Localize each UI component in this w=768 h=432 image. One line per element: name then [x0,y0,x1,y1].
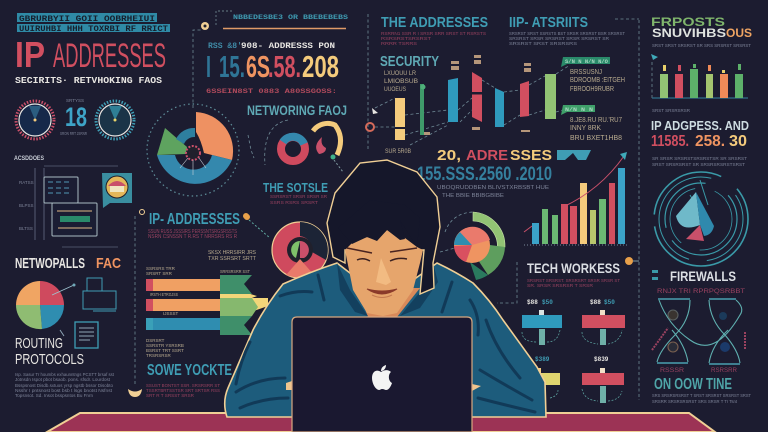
widgets: tech workess: $50 [604,299,615,306]
text block: sowe yockte: SRT R T SRSST SRSR [146,393,194,399]
heading: on oow tine: SRSRR SRSRSRSRST SRS SRSR T Tr Tsnt [652,399,738,405]
chart: security bars [366,55,570,155]
fringe [338,200,420,247]
text block: routing: Nsshr I pntsnost bost bsb t lsgs bnotst Nsfnst [15,388,113,394]
heading: the sotsle: SSRSRST SRSR SRSR SR [270,194,328,200]
widgets: tech workess: $839 [594,356,609,363]
heading: security [380,53,439,93]
shirt folds [236,275,535,412]
hands [286,381,481,391]
header: centre caption: NBBEDESBE3 OR BBEBEBEBS [233,14,348,21]
heading: ip atsriits: IIP- ATSRIITS [509,14,588,31]
big stats: 20 addresses: SSES [510,147,552,164]
big ip number: .58. [268,49,301,84]
heading: tech workess: TECH WORKESS [527,260,620,276]
chart: ribbon bars: IRSTH ETRGJSS [150,292,178,297]
header: centre caption [201,11,348,30]
heading: the addresses [381,14,488,47]
table [47,413,715,432]
icon: left gauge [16,101,54,139]
panel: device diagram: BLTSS [19,226,33,231]
chart: ribbon bars [146,250,268,358]
chart: column chart: SRST SRSRSRSR [652,108,691,113]
callouts: tags [561,57,625,142]
chart: left mid ring [244,214,328,278]
facial features [347,248,417,253]
hair [327,160,440,294]
heading: ip atsriits: SRSRST SRST SSRSTS BST SRSR SRSRST BSR SRSRST [509,31,625,37]
chart: ribbon bars: SRRSRSRR SST [220,269,250,274]
heading: firewalls: FIREWALLS [670,268,736,284]
chart: ribbon bars: TXR SSRSRT SRTT [208,256,256,262]
text block: sowe yockte [146,383,220,399]
chart: ribbon bars: SSRSTR YSRSRB [146,343,184,348]
chart: ribbon bars: SKSX HRRSIRR JRS [208,250,257,256]
labels: hourglass [660,368,738,374]
text block: sowe yockte: SSUST BONTST SSR. SRSRSRR ST [146,383,220,389]
big stats: 20 addresses: 20, [437,147,461,164]
callouts: tags: 8.JE8.RU RU.'RU7 [570,117,622,124]
heading: tech workess: SR. SRSR SRSRSR T SRSR [527,283,594,289]
panel: device diagram [19,166,118,247]
heading: firewalls [652,268,745,295]
heading: ip addresses: SSUN RUSS JSSSIRS PERSSNTSRGSRSSTS [148,229,238,235]
collar shadows [337,263,438,316]
subtitle: SECIRITS· RETVHOKING FAOS [15,76,163,86]
chart: ribbon bars: SRSRT SRR [146,271,173,276]
chart: ribbon bars: DSRSRT [146,338,165,343]
heading: ip addresses: IP- ADDRESSES [149,211,240,228]
heading: ip atsriits: SRSRST SRSR SRSRST SRSR SRSRST SR [509,36,610,42]
big stats: 20 addresses: THE BBIE BBIBGBIBE [442,193,504,199]
big ip number: I [206,49,211,84]
heading: security: UUOEUS [384,86,407,93]
stat: 18: 18 [65,102,87,132]
laptop [292,317,472,432]
heading: ip address and: SRST SRSRSRST SR SRSRSRSRSTSRST [652,162,745,168]
text block: routing: Bsspsnost Disdb.sxtuos yrsp ngstb bssor Disobto [15,383,113,389]
chart: ribbon bars: SSRSRS TRR [146,266,176,271]
heading: routing protocols: PROTOCOLS [15,351,84,368]
callouts: tags: BDROOMB :EITGEH [570,77,625,84]
face [345,230,423,316]
icon: apple logo [372,365,392,390]
widgets: tech workess: $88 [590,299,601,306]
heading: ip addresses [140,210,249,240]
heading: firewalls: RNJX TRI RPRPQSRBBT [657,288,745,295]
chart: radar rings [654,172,748,266]
chart: security bars: SUR 5R0B [385,149,411,155]
widgets: tech workess: $389 [535,356,550,363]
chart: column chart [651,54,748,113]
big ip number [206,42,339,95]
heading: ip address and: 258. [695,133,725,150]
callouts: tags: BRU BXET1HB8 [570,135,622,142]
heading: frposts [651,15,752,49]
heading: ip address and: 11585. [651,133,689,150]
text block: sowe yockte: TSSRTBRTSSTSR SRT SRTSR RSS [146,388,220,394]
big ip number: RSS &8' [208,42,242,51]
heading: on oow tine: ON OOW TINE [654,376,732,393]
big stats: 20 addresses: 155.SSS.2560 .2010 [417,164,552,185]
heading: frposts: SNUVIHBS [652,26,726,40]
stat: 18: SRTYSS [66,98,84,103]
callouts: tags: FBROOH9RUBR [570,86,614,93]
heading: the addresses: RRRR TSRRS [381,41,417,47]
stat: 18 [60,98,88,136]
big stats: 20 addresses: ADRE [466,147,508,164]
big stats: 20 addresses: UBOQRUDDBEN BLIVSTXRBSBT HUE [437,185,549,191]
heading: security: LXUOUU LR [384,70,416,77]
chart: ribbon bars: TRSRSRSR [146,353,172,358]
heading: acsddoes: ACSDDOES [14,156,44,162]
widgets: tech workess [522,299,625,403]
icon: right gauge [96,101,134,139]
heading: on oow tine [652,376,751,405]
heading: security: LMIOBSUB [384,78,418,85]
text block: routing: Topsnsot. Sd. Insot bsspsntos Bu Fnrn [15,393,93,399]
top banner: GBRURBYII GOII OOBRHEIUI [19,15,155,24]
widgets: tech workess: $88 [527,299,538,306]
heading: the sotsle [263,180,328,206]
heading: frposts: FRPOSTS [651,15,725,29]
heading: sowe yockte: SOWE YOCKTE [147,362,232,379]
big ip number: 6S [246,49,270,84]
heading: ip addresses: NSRN CSNSSN T R.RS T NRRSRS RS R [148,234,237,240]
big ip number: 908- ADDRESSS PON [241,42,335,51]
icon: network boxes [60,278,116,348]
heading: the sotsle: SSRS RSRS SRSRT [270,200,318,206]
callouts: tags: INNY 8RK [570,125,601,132]
heading: ip address and: SR SRSR SRSRSTSRSRSTSR SR SRSRST [652,156,747,162]
heading: ip address and: IP ADGPESS. AND [651,118,749,133]
heading: networks: FAC [96,255,121,272]
text block: routing [15,372,115,399]
heading: routing protocols [15,335,84,368]
panel: device diagram: RATSS [19,180,34,185]
title: ADDRESSES [53,37,166,75]
heading: frposts: SRST SRST SRSRST SR SRS SRSRST SRSRST [652,43,751,49]
heading: security: SECURITY [380,53,439,70]
top banner: UUIRUHBI HHH TOXRBI RF RRICT [19,25,168,34]
icon: speech bubble [102,173,132,208]
neck [357,288,420,317]
shirt [225,263,546,417]
illustration: person [225,160,546,417]
heading: networks: NETWOPALLS [15,255,85,272]
callouts: tags: S/N N N/N N/O [565,58,609,65]
heading: networking faq: NETWORING FAOJ [247,102,347,118]
heading: ip address and [651,118,749,168]
heading: ip atsriits: SRSRST SRST SRSRSRS [509,41,577,47]
panel: device diagram: BLPSS [19,203,34,208]
chart: small donut [248,120,343,172]
top banner [17,13,170,34]
text block: routing: Jotnsdn Ispot pbot bsaob. pons. sfsdr. Lourdost [15,377,111,383]
heading: ip address and: 30 [729,133,747,150]
chart: ribbon bars: BSRST TRT SSRT [146,348,184,353]
heading: on oow tine: SRS SRSRSRSRST T SRST SRSRST SRSRST SRST [652,393,751,399]
callouts: tags: N/N N N [565,106,593,113]
heading: the addresses: THE ADDRESSES [381,14,488,31]
title [15,34,166,75]
big ip number: 6SSEIN8ST 0883 A80SSGOSS: [206,88,337,95]
big stats: 20 addresses [417,147,591,199]
dashed arrow [497,262,517,303]
text block: routing: Isp. Sasur Tr houmbs exhaunntngs PCSTT brsaf sst [15,372,115,378]
chart: rising bars [524,152,628,245]
labels: hourglass: RSSSR [660,368,685,374]
callouts: tags: BRSSUSNJ [570,69,602,76]
heading: the addresses: RSRRN1 SSR R I SRSR SRR SRST ST RSRSTS [381,31,486,37]
big ip number: 15. [219,49,245,84]
chart: ribbon bars: IJSSST [163,311,179,316]
chart: hourglass curves [652,299,745,364]
icon: orange badge [625,257,639,265]
heading: routing protocols: ROUTING [15,335,63,352]
chart: pie [16,281,76,329]
heading: the sotsle: THE SOTSLE [263,180,328,195]
heading: tech workess: SRSRST SRSRST. SRSRSRT SRSR SRSR ST [527,278,620,284]
title: IP [15,34,45,75]
stat: 18: SRON RRT JSRNR [60,131,88,136]
chart: main donut [147,104,239,196]
big ip number: 208 [302,49,339,84]
heading: the addresses: RSRSRSTSRSRST [381,36,431,42]
chart: right mid pie [440,212,505,280]
heading: ip atsriits [509,14,625,47]
labels: hourglass: RSRSRR [711,368,738,374]
icon: bottom badge [128,389,142,397]
widgets: tech workess: $50 [542,299,553,306]
heading: frposts: OUS [726,26,752,40]
heading: tech workess [527,260,620,289]
